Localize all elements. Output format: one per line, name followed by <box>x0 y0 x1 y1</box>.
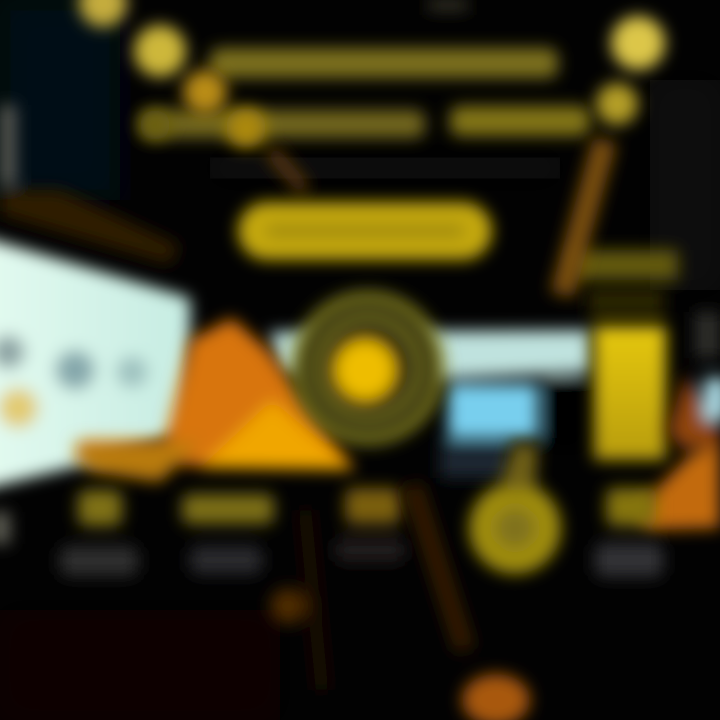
background accents <box>0 0 468 265</box>
panel: right orange shape <box>635 312 720 530</box>
lower icon row <box>0 488 663 577</box>
panel: left pale screen <box>0 236 190 490</box>
panel: orange triangle <box>72 318 355 482</box>
title text blocks <box>140 48 590 138</box>
button <box>238 202 492 260</box>
decorative lights <box>79 0 665 295</box>
icon: yellow circle medal <box>469 442 561 574</box>
connector trail <box>270 485 530 720</box>
panel: centre pale band <box>270 330 590 478</box>
panel: yellow column <box>572 250 678 460</box>
icon: central circle target <box>296 296 440 440</box>
